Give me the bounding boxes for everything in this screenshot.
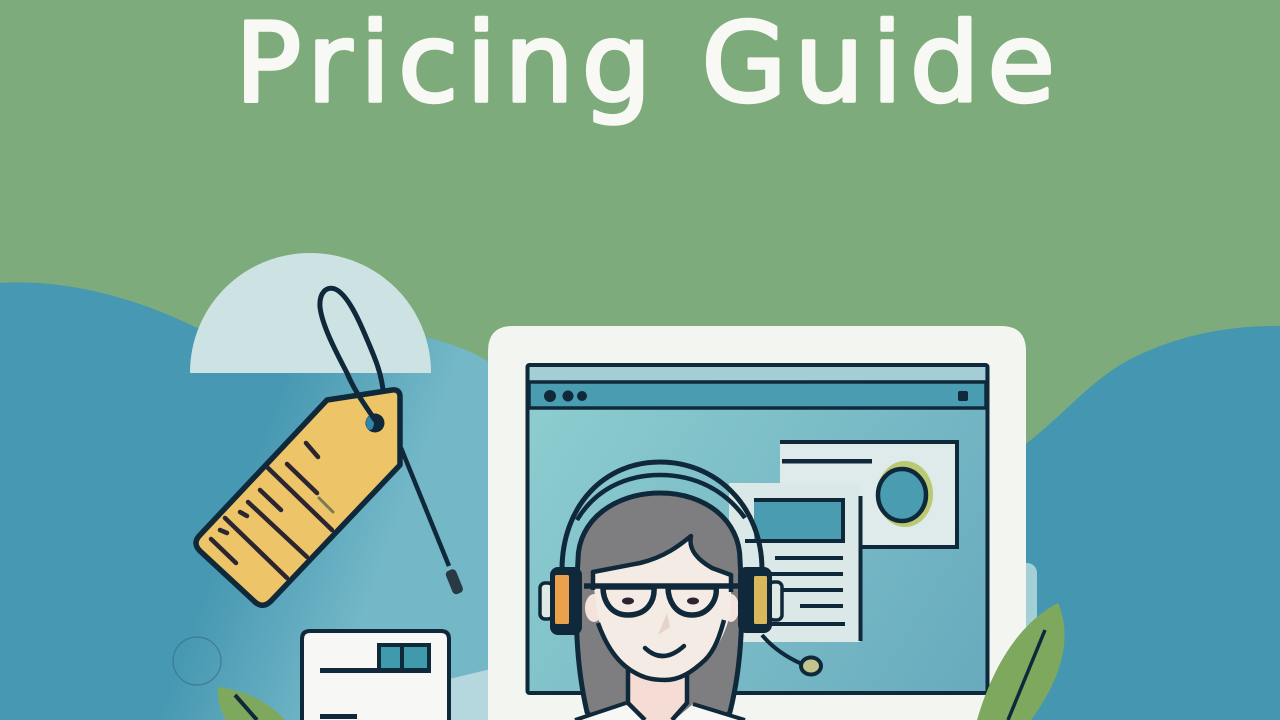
pale semicircle (190, 253, 431, 373)
front card lines (767, 556, 845, 626)
string end cap (445, 568, 464, 595)
document line (320, 668, 430, 673)
hair (576, 493, 742, 720)
monitor (488, 326, 1037, 720)
screen (528, 365, 988, 693)
document body (302, 631, 449, 720)
back card (780, 442, 957, 547)
small document icon (302, 631, 449, 720)
browser top strip (530, 367, 985, 380)
back card line (782, 459, 872, 464)
right ear (723, 594, 739, 622)
neck (628, 665, 687, 720)
shirt collar (575, 703, 745, 720)
decorative ring (173, 637, 221, 685)
tile divider (400, 645, 404, 671)
monitor side tab (1015, 563, 1037, 667)
eyelet highlight (366, 416, 374, 430)
nose (658, 613, 670, 635)
tag body (196, 390, 400, 605)
front card image (754, 500, 843, 541)
shirt (575, 703, 745, 720)
left blue wave (0, 282, 495, 720)
tag text lines (211, 443, 333, 578)
eyes (622, 598, 699, 604)
left ear cup (540, 567, 582, 635)
yellow pad (754, 576, 767, 624)
fringe and jaw outline (593, 536, 731, 680)
monitor frame (488, 326, 1026, 720)
right blue wave (1015, 326, 1280, 720)
document image tiles (379, 645, 429, 671)
green ring (877, 461, 933, 527)
loose string (401, 448, 449, 566)
window dots (544, 390, 968, 402)
image edges (745, 500, 843, 541)
pale patch behind the monitor (445, 668, 495, 720)
orange pad (555, 575, 569, 624)
tag eyelet (366, 414, 384, 432)
right leaf (977, 603, 1065, 720)
glasses (584, 586, 738, 615)
headband (562, 462, 762, 570)
tag string loop (320, 288, 383, 420)
document short line (320, 714, 357, 719)
price tag icon (196, 288, 464, 605)
browser toolbar (529, 382, 986, 408)
right ear cup (738, 567, 782, 633)
support agent (540, 462, 821, 720)
smile (645, 646, 684, 656)
front card edge (858, 496, 862, 641)
front card (729, 483, 862, 642)
title: Pricing Guide (235, 0, 1055, 127)
small left leaf (218, 687, 285, 720)
left ear (585, 594, 603, 622)
round image (878, 469, 926, 521)
microphone (762, 635, 821, 674)
face (592, 537, 731, 680)
